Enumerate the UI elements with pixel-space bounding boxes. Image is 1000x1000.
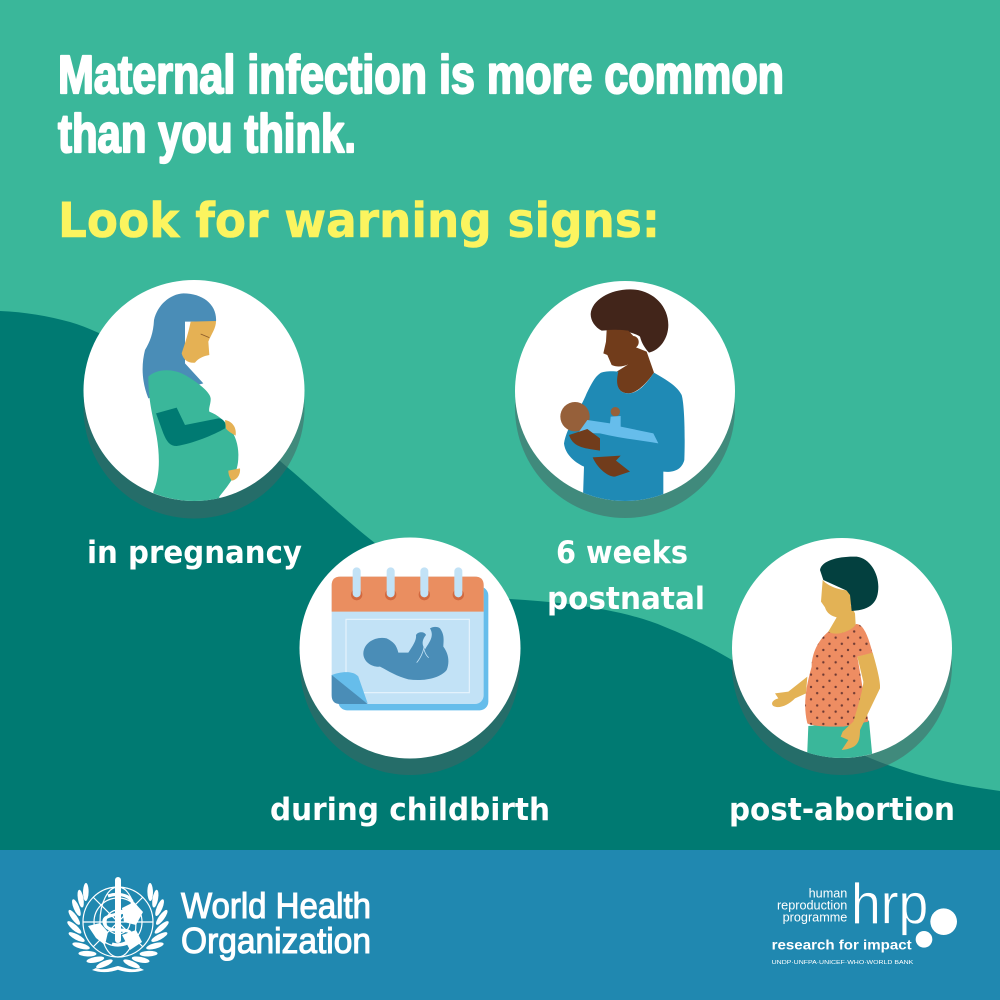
subheading: warning signs: Look for warning signs: <box>58 193 660 249</box>
circle shadow <box>300 555 520 775</box>
label: during childbirth: during childbirth <box>270 792 550 828</box>
logo: HRP research for impact <box>772 872 957 966</box>
logo text: World Health Organization: World Health <box>181 885 371 926</box>
label: 6 weeks postnatal: postnatal <box>547 581 705 617</box>
label: post-abortion: post-abortion <box>729 792 955 828</box>
white circle <box>300 538 520 758</box>
globe <box>83 887 153 957</box>
programme name: human <box>809 886 847 900</box>
laurel wreath right <box>116 883 170 972</box>
circle shadow <box>84 298 304 518</box>
label: 6 weeks postnatal: 6 weeks <box>556 535 688 571</box>
dark teal wave <box>0 311 1000 850</box>
icon: calendar with foetus <box>332 567 488 710</box>
staff and serpent <box>104 877 132 945</box>
panel: in pregnancy <box>84 280 304 518</box>
circle shadow <box>515 298 735 518</box>
tagline: research for impact <box>772 936 912 952</box>
white circle <box>515 281 735 501</box>
icon: woman standing <box>772 557 880 767</box>
label: in pregnancy: in pregnancy <box>87 535 302 571</box>
circle shadow <box>732 555 952 775</box>
panel: 6 weeks postnatal <box>515 281 735 518</box>
laurel wreath left <box>66 883 120 972</box>
continents <box>88 902 143 950</box>
icon: pregnant woman <box>143 293 240 507</box>
logo text: World Health Organization: Organization <box>181 920 371 961</box>
label: 6 weeks postnatal <box>547 535 705 617</box>
footer band <box>0 850 1000 1000</box>
white circle <box>84 280 304 501</box>
programme name: programme <box>783 911 847 925</box>
hrp dots <box>916 908 957 948</box>
white circle <box>732 538 952 758</box>
hrp wordmark: hrp <box>851 872 928 936</box>
panel: during childbirth <box>300 538 520 775</box>
title: than you think. <box>58 104 356 164</box>
logo: WHO emblem <box>66 877 170 972</box>
panel: post-abortion <box>732 538 952 775</box>
title <box>58 45 784 164</box>
programme name: reproduction <box>777 898 847 912</box>
icon: mother holding baby <box>560 289 685 507</box>
title: Maternal infection is more common <box>58 45 784 105</box>
logo text: World Health Organization <box>181 885 371 961</box>
sponsors: UNDP·UNFPA·UNICEF·WHO·WORLD BANK <box>772 960 914 966</box>
programme name <box>777 886 847 925</box>
